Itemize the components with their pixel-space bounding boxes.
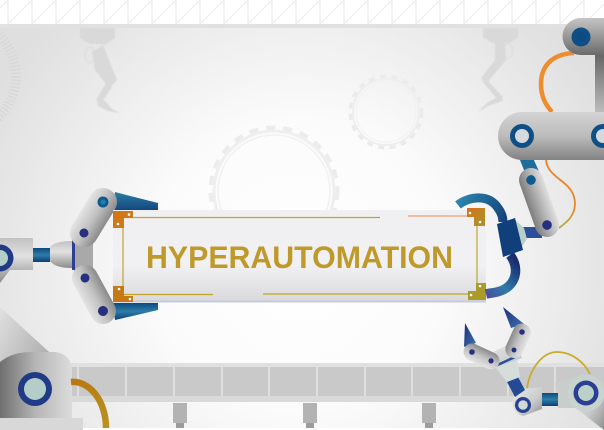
lower blue jaw — [113, 303, 158, 320]
conveyor leg 1 — [173, 403, 187, 428]
lower claw — [486, 255, 516, 294]
blue link — [540, 393, 558, 406]
left jaw — [464, 323, 476, 347]
shoulder — [555, 374, 604, 430]
orange frame line — [408, 215, 468, 217]
upper blue jaw — [113, 192, 158, 212]
conveyor belt — [0, 363, 604, 430]
upper finger — [65, 183, 122, 252]
title: HYPERAUTOMATION — [146, 239, 453, 275]
top capsule — [562, 18, 604, 114]
banner panel — [113, 208, 486, 302]
lower finger — [67, 260, 121, 329]
gold frame — [123, 217, 477, 294]
bracket: bottom left — [113, 286, 133, 302]
wrist — [50, 241, 72, 268]
robot arm: left gripper — [0, 183, 158, 329]
conveyor leg 2 — [303, 403, 317, 428]
ceiling truss — [0, 0, 604, 28]
big capsule — [498, 112, 604, 160]
thin cable — [546, 160, 575, 228]
right jaw — [503, 307, 524, 328]
gold cable — [527, 352, 590, 388]
elbow joint — [0, 238, 33, 283]
palm — [491, 342, 522, 368]
upper claw — [458, 198, 503, 222]
robot arm: bottom left base — [0, 307, 106, 430]
neck — [495, 358, 520, 382]
robot arm: bottom right gripper — [461, 307, 604, 430]
bracket: bottom right — [468, 283, 486, 300]
left finger — [461, 341, 502, 372]
gripper block — [497, 218, 523, 257]
blue strut — [507, 377, 525, 397]
elbow — [513, 387, 542, 416]
bracket: top right — [467, 208, 485, 226]
gold cable — [71, 382, 106, 428]
bracket: top left — [113, 211, 133, 228]
right finger — [503, 321, 534, 361]
ghost robot arm: right — [478, 28, 518, 112]
forearm capsule — [516, 165, 562, 240]
palm — [72, 234, 93, 278]
joint ring — [18, 372, 52, 406]
blue link — [520, 227, 542, 238]
ghost robot arm: left — [80, 28, 120, 113]
faint gear: small — [350, 76, 422, 148]
orange cable — [541, 53, 574, 112]
faint gear: large — [211, 128, 337, 254]
blue stub — [520, 158, 541, 180]
blue wrist bar — [33, 248, 50, 262]
faint gear: far left — [0, 18, 16, 134]
conveyor leg 3 — [422, 403, 436, 428]
wrist cone — [513, 218, 527, 248]
palm blue stripe — [493, 357, 515, 367]
robot arm: top right — [458, 18, 604, 294]
